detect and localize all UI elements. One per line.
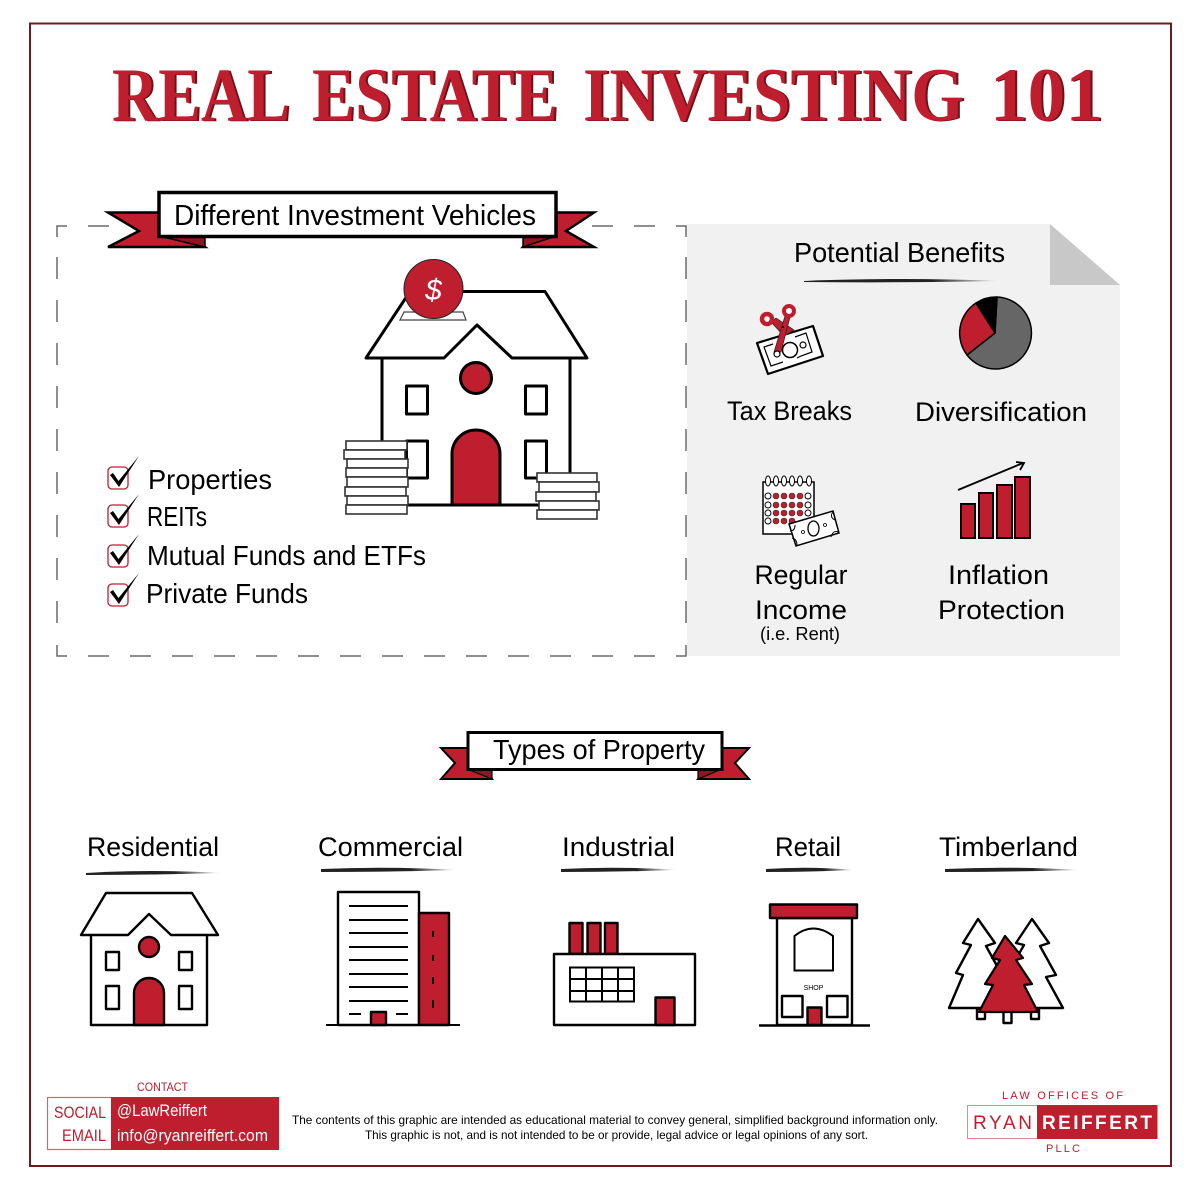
title <box>112 54 1105 138</box>
disclaimer: This graphic is not, and is not intended to be or provide, legal advice or legal opinions of any sort. <box>365 1128 868 1142</box>
item: private funds <box>108 573 308 609</box>
label: inflation protection: Protection <box>938 595 1065 625</box>
label: tax breaks: Tax Breaks <box>727 396 852 426</box>
icon: piggy-bank house with coin and stacks: $ <box>424 274 443 307</box>
label: timberland: Timberland <box>939 832 1078 862</box>
banner: types of property <box>441 732 749 779</box>
banner: types of property: Types of Property <box>493 734 705 765</box>
label: regular income: Income <box>755 595 847 625</box>
item: REITs: REITs <box>147 501 207 532</box>
footer: contact block: info@ryanreiffert.com <box>117 1127 268 1145</box>
heading: potential benefits: Potential Benefits <box>794 237 1005 268</box>
panel: different investment vehicles <box>57 192 686 656</box>
column: industrial <box>554 832 695 1025</box>
column: timberland <box>939 832 1080 1023</box>
footer: contact block: EMAIL <box>62 1127 106 1145</box>
label: regular income: Regular <box>754 560 848 590</box>
logo: law offices of ryan reiffert <box>968 1090 1158 1155</box>
icon: rising bar chart <box>958 462 1030 538</box>
title: INVESTING <box>585 54 966 138</box>
footer: contact block: @LawReiffert <box>117 1102 207 1120</box>
disclaimer <box>292 1113 938 1142</box>
disclaimer: The contents of this graphic are intended as educational material to convey general, simplified background information only. <box>292 1113 938 1127</box>
banner: different investment vehicles <box>108 192 594 247</box>
title: ESTATE <box>314 54 560 138</box>
logo: law offices of ryan reiffert: RYAN <box>973 1113 1032 1134</box>
label: retail: Retail <box>775 832 841 862</box>
label: diversification: Diversification <box>915 397 1087 427</box>
footer: contact block <box>48 1080 279 1150</box>
title: 101 <box>992 54 1105 138</box>
icon: factory <box>554 923 695 1025</box>
footer: contact block: CONTACT <box>137 1080 189 1094</box>
item: properties: Properties <box>148 464 272 495</box>
logo: law offices of ryan reiffert: LAW OFFICES OF <box>1002 1090 1123 1102</box>
banner: different investment vehicles: Different Investment Vehicles <box>174 200 536 232</box>
logo: law offices of ryan reiffert: REIFFERT <box>1042 1113 1152 1134</box>
icon: pie chart <box>960 297 1031 369</box>
title: 101 <box>990 54 1103 138</box>
label: residential: Residential <box>87 832 219 862</box>
icon: scissors cutting money <box>757 306 823 374</box>
item: REITs <box>108 494 207 532</box>
panel: potential benefits <box>687 224 1120 656</box>
label: regular income: (i.e. Rent) <box>760 624 840 644</box>
item: mutual funds and ETFs: Mutual Funds and ETFs <box>147 540 426 571</box>
title: ESTATE <box>312 54 558 138</box>
label: inflation protection <box>938 560 1065 625</box>
icon: house <box>81 893 218 1025</box>
footer: contact block: SOCIAL <box>54 1104 106 1122</box>
item: properties <box>108 456 272 495</box>
title: INVESTING <box>583 54 964 138</box>
item: mutual funds and ETFs <box>108 534 426 571</box>
icon: piggy-bank house with coin and stacks <box>344 260 599 519</box>
icon: shop <box>759 904 870 1026</box>
icon: trees <box>949 919 1063 1023</box>
column: retail <box>759 832 870 1026</box>
label: industrial: Industrial <box>562 832 675 862</box>
icon: shop: SHOP <box>804 985 824 992</box>
logo: law offices of ryan reiffert: PLLC <box>1046 1143 1080 1155</box>
dashed frame <box>57 226 686 656</box>
column: commercial <box>318 832 463 1025</box>
icon: office building <box>326 892 460 1025</box>
icon: calendar with money <box>763 476 839 546</box>
column: residential <box>81 832 222 1025</box>
item: private funds: Private Funds <box>146 578 308 609</box>
label: regular income <box>754 560 848 644</box>
title: REAL <box>112 54 290 138</box>
checklist <box>108 456 426 609</box>
label: inflation protection: Inflation <box>948 560 1049 590</box>
title: REAL <box>114 54 292 138</box>
label: commercial: Commercial <box>318 832 463 862</box>
